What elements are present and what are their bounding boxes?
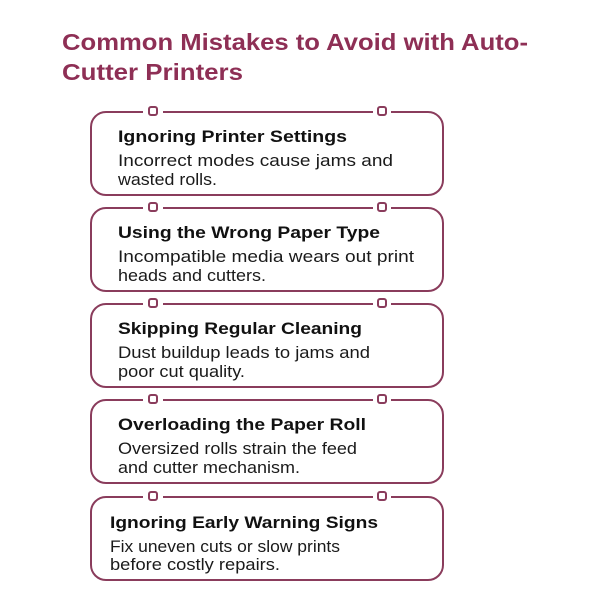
- card: ignoring printer settings: Incorrect modes cause jams and: [118, 151, 393, 170]
- card: wrong paper type: [91, 203, 443, 291]
- card: overloading paper roll: [91, 395, 443, 483]
- card: skipping cleaning: [91, 299, 443, 387]
- card: ignoring printer settings: [91, 107, 443, 195]
- card: ignoring printer settings: wasted rolls.: [117, 170, 217, 189]
- card: early warning signs: before costly repairs.: [110, 555, 280, 574]
- card: skipping cleaning: poor cut quality.: [118, 362, 245, 381]
- card: early warning signs: Fix uneven cuts or slow prints: [110, 537, 340, 556]
- card: skipping cleaning: Skipping Regular Cleaning: [118, 319, 362, 338]
- card: ignoring printer settings: Ignoring Printer Settings: [118, 127, 347, 146]
- card: wrong paper type: heads and cutters.: [118, 266, 266, 285]
- card: wrong paper type: Using the Wrong Paper Type: [118, 223, 380, 242]
- card: overloading paper roll: and cutter mechanism.: [118, 458, 300, 477]
- card: wrong paper type: Incompatible media wears out print: [118, 247, 414, 266]
- card: skipping cleaning: Dust buildup leads to jams and: [118, 343, 370, 362]
- title: [62, 29, 528, 85]
- title: Cutter Printers: [62, 59, 243, 85]
- title: Common Mistakes to Avoid with Auto-: [62, 29, 528, 55]
- card: overloading paper roll: Oversized rolls strain the feed: [118, 439, 357, 458]
- card: overloading paper roll: Overloading the Paper Roll: [118, 415, 366, 434]
- card: early warning signs: [91, 492, 443, 580]
- card: early warning signs: Ignoring Early Warning Signs: [110, 513, 378, 532]
